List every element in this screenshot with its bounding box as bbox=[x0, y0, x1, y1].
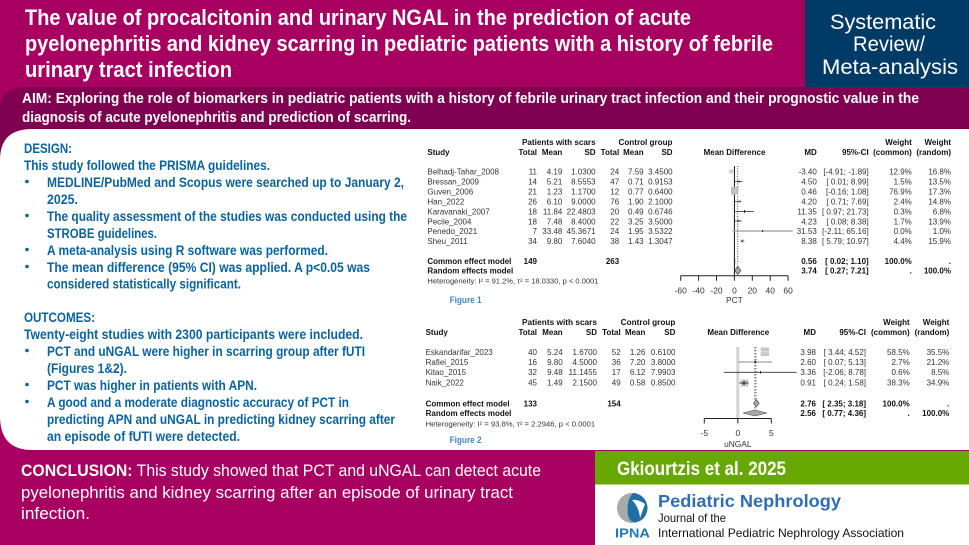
figure 2 study rows: 0.58 bbox=[630, 378, 646, 388]
outcomes section: OUTCOMES: bbox=[24, 310, 95, 326]
figure 1 study rows: [ 0.71; 7.69] bbox=[826, 198, 869, 206]
figure 1 study rows: 11.84 bbox=[543, 207, 563, 216]
figure 1 study rows: Belhadj-Tahar_2008 bbox=[427, 168, 500, 176]
figure 2 summary rows: . bbox=[907, 409, 910, 418]
figure 2 study rows: 0.8500 bbox=[651, 378, 676, 388]
figure 1 summary rows: [ 0.02; 1.10] bbox=[825, 257, 869, 266]
figure 1 table header: Weight bbox=[924, 138, 951, 147]
figure 1 study rows: 7 bbox=[533, 227, 538, 236]
figure 2 study rows: 2.7% bbox=[891, 358, 910, 367]
figure 2 summary rows: 154 bbox=[607, 400, 621, 408]
figure 2 study rows: 17 bbox=[612, 368, 621, 377]
figure 1 study rows: Sheu_2011 bbox=[427, 237, 468, 246]
figure 1 study rows: -3.40 bbox=[799, 168, 817, 176]
figure 1 summary rows: Random effects model bbox=[427, 266, 513, 276]
figure 2 table header: Total bbox=[518, 328, 537, 337]
figure 2 study rows: [-2.06; 8.78] bbox=[823, 368, 866, 377]
figure 1 plot: -60 bbox=[675, 286, 687, 296]
figure 2 study rows: Kitao_2015 bbox=[426, 368, 467, 377]
outcomes section: an episode of fUTI were detected. bbox=[47, 429, 240, 445]
figure 1 summary rows: . bbox=[910, 266, 912, 276]
figure 2 study rows: 0.6% bbox=[891, 368, 910, 377]
figure 1 study rows bbox=[427, 168, 951, 246]
outcomes section: PCT and uNGAL were higher in scarring group after fUTI bbox=[47, 344, 365, 360]
figure 1 study rows: 18 bbox=[528, 217, 538, 226]
icon: IPNA globe logo: IPNA bbox=[615, 526, 650, 540]
figure 1 table header: (common) bbox=[873, 148, 912, 157]
journal name: Pediatric Nephrology bbox=[658, 491, 841, 511]
figure 2 caption: Figure 2 bbox=[450, 435, 482, 445]
figure 1 study rows: 24 bbox=[610, 227, 620, 236]
figure 1 study rows: 22.4803 bbox=[567, 207, 596, 216]
figure 1 study rows: Han_2022 bbox=[427, 198, 465, 206]
figure 1 plot: -20 bbox=[710, 286, 723, 296]
figure 1 study rows: [-2.11; 65.16] bbox=[822, 227, 869, 236]
figure 2 study rows: 0.91 bbox=[800, 378, 817, 388]
figure 1 study rows: 20 bbox=[610, 207, 620, 216]
aim band bbox=[0, 87, 969, 170]
figure 1 study rows: 8.38 bbox=[801, 237, 817, 246]
design section: MEDLINE/PubMed and Scopus were searched up to January 2, bbox=[47, 175, 404, 191]
figure 1 study rows: 34 bbox=[528, 237, 538, 246]
figure 1 study rows: Bressan_2009 bbox=[427, 178, 480, 186]
figure 1 plot: 20 bbox=[748, 286, 757, 296]
figure 1 study rows: 8.5553 bbox=[571, 178, 596, 186]
figure 2 study rows: 2.60 bbox=[800, 358, 817, 367]
figure 2 plot: uNGAL bbox=[724, 439, 752, 449]
figure 2 summary rows: 2.76 bbox=[800, 400, 817, 408]
figure 2 study rows: 9.48 bbox=[547, 368, 563, 377]
figure 1 summary rows: 100.0% bbox=[924, 266, 951, 276]
figure 1 study rows: 4.20 bbox=[801, 198, 817, 206]
figure 1 study rows: 0.9153 bbox=[648, 178, 673, 186]
design section bbox=[24, 141, 407, 292]
design section: DESIGN: bbox=[24, 141, 72, 157]
outcomes section: predicting APN and uNGAL in predicting kidney scarring after bbox=[47, 412, 395, 428]
design section: A meta-analysis using R software was performed. bbox=[47, 243, 328, 259]
figure 1 study rows: 17.3% bbox=[928, 188, 951, 196]
figure 1 study rows: 45.3671 bbox=[567, 227, 596, 236]
journal affiliation: International Pediatric Nephrology Association bbox=[658, 527, 904, 540]
figure 1 study rows: 13.9% bbox=[928, 217, 951, 226]
figure 2 plot: -5 bbox=[701, 428, 708, 438]
figure 2 table header: Study bbox=[426, 328, 448, 337]
figure 2 study rows: 21.2% bbox=[927, 358, 949, 367]
figure 1 study rows: 18 bbox=[528, 207, 538, 216]
figure 2 summary rows: 2.56 bbox=[800, 409, 817, 418]
outcomes section bbox=[24, 310, 395, 445]
forest plot: figure 1 PCT bbox=[427, 138, 951, 305]
figure 2 summary rows: [ 2.35; 3.18] bbox=[822, 400, 866, 408]
figure 2 summary rows: Random effects model bbox=[426, 409, 511, 418]
figure 1 study rows: 3.25 bbox=[628, 217, 644, 226]
figure 2 study rows: 32 bbox=[528, 368, 538, 377]
figure 2 study rows: 45 bbox=[528, 378, 538, 388]
figure 1 table header: Mean Difference bbox=[704, 148, 766, 157]
figure 2 study rows: 1.49 bbox=[547, 378, 563, 388]
title banner: The value of procalcitonin and urinary NGAL in the prediction of acute bbox=[25, 5, 691, 30]
figure 1 study rows: 11 bbox=[529, 168, 538, 176]
study type badge: Meta-analysis bbox=[822, 55, 958, 79]
figure 1 study rows: 12.9% bbox=[889, 168, 912, 176]
title banner: urinary tract infection bbox=[25, 57, 232, 82]
figure 1 plot: 40 bbox=[766, 286, 775, 296]
figure 1 caption: Figure 1 bbox=[450, 295, 482, 305]
forest plot: figure 2 uNGAL bbox=[426, 318, 950, 449]
figure 2 study rows: 3.98 bbox=[800, 348, 817, 357]
design section: considered statistically significant. bbox=[47, 276, 241, 292]
figure 1 summary rows: 100.0% bbox=[885, 257, 912, 266]
figure 2 study rows: 0.6100 bbox=[651, 348, 676, 357]
figure 1 study rows: 9.80 bbox=[547, 237, 563, 246]
figure 1 study rows: 2.1000 bbox=[648, 198, 673, 206]
figure 1 study rows: 14.8% bbox=[928, 198, 951, 206]
figure 1 study rows: 7.6040 bbox=[571, 237, 596, 246]
figure 1 study rows: 3.4500 bbox=[648, 168, 673, 176]
figure 1 study rows: 1.5% bbox=[894, 178, 912, 186]
design section: STROBE guidelines. bbox=[47, 226, 157, 242]
figure 2 study rows: 1.6700 bbox=[573, 348, 598, 357]
figure 1 study rows: 6.10 bbox=[547, 198, 563, 206]
figure 1 plot: 0 bbox=[732, 286, 737, 296]
figure 2 study rows: 58.5% bbox=[887, 348, 910, 357]
study type badge bbox=[805, 0, 969, 87]
figure 1 study rows: 3.5322 bbox=[648, 227, 673, 236]
figure 2 summary rows bbox=[426, 400, 949, 428]
figure 1 study rows: 9.0000 bbox=[571, 198, 596, 206]
figure 1 study rows: 4.50 bbox=[801, 178, 817, 186]
figure 1 plot: -40 bbox=[693, 286, 705, 296]
design section: The quality assessment of the studies was conducted using the bbox=[47, 209, 407, 225]
figure 1 table header: Patients with scars bbox=[522, 138, 596, 147]
figure 2 plot bbox=[701, 347, 797, 449]
figure 1 study rows: 1.0% bbox=[933, 227, 951, 236]
figure 1 summary rows: 0.56 bbox=[801, 257, 817, 266]
figure 1 study rows: 8.4000 bbox=[571, 217, 596, 226]
citation bar: Gkiourtzis et al. 2025 bbox=[617, 458, 786, 480]
figure 1 study rows: 1.43 bbox=[628, 237, 644, 246]
figure 1 study rows: 2.4% bbox=[894, 198, 912, 206]
figure 1 table header bbox=[427, 138, 951, 157]
design section: This study followed the PRISMA guidelines. bbox=[24, 158, 270, 174]
title banner bbox=[0, 0, 805, 87]
figure 2 study rows: 38.3% bbox=[887, 378, 910, 388]
conclusion band: CONCLUSION: This study showed that PCT and uNGAL can detect acute bbox=[21, 461, 541, 480]
figure 1 plot: PCT bbox=[726, 295, 743, 305]
figure 1 table header: Study bbox=[427, 148, 450, 157]
figure 2 table header: Mean Difference bbox=[707, 328, 770, 337]
figure 2 table header: Patients with scars bbox=[522, 318, 598, 327]
figure 2 summary rows: Heterogeneity: I² = 93.8%, τ² = 2.2946, p < 0.0001 bbox=[426, 420, 595, 428]
figure 1 study rows: 7.48 bbox=[547, 217, 563, 226]
figure 1 study rows: 15.9% bbox=[928, 237, 951, 246]
figure 2 table header bbox=[426, 318, 950, 337]
figure 1 study rows: 12 bbox=[610, 188, 620, 196]
figure 2 study rows: Naik_2022 bbox=[426, 378, 464, 388]
figure 2 study rows: 6.12 bbox=[630, 368, 646, 377]
figure 2 study rows: 1.26 bbox=[630, 348, 646, 357]
figure 2 study rows: 49 bbox=[612, 378, 621, 388]
figure 2 table header: SD bbox=[664, 328, 676, 337]
figure 2 study rows: 4.5000 bbox=[573, 358, 598, 367]
outcomes section: Twenty-eight studies with 2300 participants were included. bbox=[24, 327, 363, 343]
figure 2 study rows: 7.20 bbox=[630, 358, 646, 367]
figure 2 study rows: 52 bbox=[612, 348, 621, 357]
figure 1 study rows: 33.48 bbox=[542, 227, 563, 236]
study type badge: Review/ bbox=[853, 32, 925, 56]
figure 1 study rows: 16.8% bbox=[928, 168, 951, 176]
figure 2 summary rows: . bbox=[947, 400, 949, 408]
figure 1 study rows: 76 bbox=[610, 198, 620, 206]
figure 1 study rows: 11.35 bbox=[797, 207, 817, 216]
figure 1 study rows: 1.3047 bbox=[648, 237, 673, 246]
journal block bbox=[595, 484, 969, 545]
figure 1 study rows: 3.5000 bbox=[648, 217, 673, 226]
outcomes section: (Figures 1&2). bbox=[47, 361, 127, 377]
figure 2 table header: (common) bbox=[871, 328, 910, 337]
figure 1 study rows: 24 bbox=[610, 168, 620, 176]
figure 1 study rows: 4.4% bbox=[894, 237, 912, 246]
figure 2 summary rows: 133 bbox=[524, 400, 538, 408]
figure 2 table header: MD bbox=[804, 328, 816, 337]
outcomes section: A good and a moderate diagnostic accuracy of PCT in bbox=[47, 395, 349, 411]
figure 1 study rows: 1.23 bbox=[547, 188, 563, 196]
figure 1 study rows: 4.23 bbox=[801, 217, 817, 226]
figure 1 study rows: Guven_2006 bbox=[427, 188, 474, 196]
outcomes section: PCT was higher in patients with APN. bbox=[47, 378, 257, 394]
figure 1 study rows: 0.71 bbox=[628, 178, 644, 186]
figure 1 summary rows: Heterogeneity: I² = 91.2%, τ² = 18.0330, p < 0.0001 bbox=[427, 276, 598, 286]
figure 1 study rows: 1.1700 bbox=[571, 188, 596, 196]
figure 1 table header: Control group bbox=[618, 138, 673, 147]
figure 2 plot: 0 bbox=[735, 428, 740, 438]
figure 2 summary rows: Common effect model bbox=[426, 400, 510, 408]
figure 1 summary rows: Common effect model bbox=[427, 257, 511, 266]
figure 1 table header: 95%-CI bbox=[842, 148, 869, 157]
figure 2 study rows: 36 bbox=[612, 358, 621, 367]
figure 2 table header: Control group bbox=[621, 318, 676, 327]
figure 1 table header: MD bbox=[804, 148, 817, 157]
figure 2 table header: Mean bbox=[625, 328, 646, 337]
figure 1 study rows: 1.7% bbox=[894, 217, 912, 226]
figure 1 study rows: 0.49 bbox=[628, 207, 644, 216]
figure 1 study rows: 47 bbox=[610, 178, 620, 186]
aim band: diagnosis of acute pyelonephritis and prediction of scarring. bbox=[22, 110, 411, 126]
figure 2 summary rows: 100.0% bbox=[883, 400, 910, 408]
figure 2 study rows: 3.36 bbox=[800, 368, 817, 377]
figure 2 table header: Weight bbox=[923, 318, 950, 327]
figure 1 study rows: [-4.91; -1.89] bbox=[823, 168, 869, 176]
figure 2 study rows: [ 0.24; 1.58] bbox=[824, 378, 866, 388]
figure 1 summary rows: . bbox=[949, 257, 951, 266]
figure 2 table header: Total bbox=[602, 328, 621, 337]
figure 1 study rows: 0.77 bbox=[628, 188, 644, 196]
figure 1 study rows: Penedo_2021 bbox=[427, 227, 478, 236]
figure 1 summary rows: 149 bbox=[524, 257, 538, 266]
figure 2 study rows: 7.9903 bbox=[651, 368, 676, 377]
figure 1 summary rows: 263 bbox=[606, 257, 620, 266]
figure 1 study rows: 76.9% bbox=[889, 188, 912, 196]
figure 1 study rows: 5.21 bbox=[547, 178, 563, 186]
figure 1 plot bbox=[675, 166, 793, 305]
aim band: AIM: Exploring the role of biomarkers in pediatric patients with a history of febrile urinary tract infection and their prognostic value in the bbox=[22, 91, 919, 107]
design section: The mean difference (95% CI) was applied. A p<0.05 was bbox=[47, 260, 370, 276]
figure 1 table header: (random) bbox=[916, 148, 951, 157]
figure 1 study rows: [ 0.01; 8.99] bbox=[826, 178, 869, 186]
figure 2 study rows: 16 bbox=[528, 358, 538, 367]
design section: 2025. bbox=[47, 192, 78, 208]
figure 1 study rows: Karavanaki_2007 bbox=[427, 207, 490, 216]
figure 2 study rows: 8.5% bbox=[931, 368, 949, 377]
citation bar bbox=[595, 451, 969, 484]
figure 1 study rows: 7.59 bbox=[628, 168, 644, 176]
figure 1 study rows: 1.95 bbox=[628, 227, 644, 236]
figure 2 study rows: 2.1500 bbox=[573, 378, 598, 388]
figure 1 study rows: 31.53 bbox=[797, 227, 817, 236]
figure 2 study rows: Rafiei_2015 bbox=[426, 358, 469, 367]
figure 2 study rows bbox=[426, 348, 949, 388]
figure 1 study rows: 0.6400 bbox=[648, 188, 673, 196]
figure 2 study rows: 40 bbox=[528, 348, 538, 357]
figure 1 table header: Total bbox=[518, 148, 537, 157]
figure 2 study rows: 34.9% bbox=[927, 378, 949, 388]
study type badge: Systematic bbox=[830, 10, 936, 34]
figure 1 summary rows bbox=[427, 257, 951, 286]
figure 2 table header: Weight bbox=[883, 318, 910, 327]
figure 2 study rows: 3.8000 bbox=[651, 358, 676, 367]
figure 2 summary rows: 100.0% bbox=[922, 409, 949, 418]
figure 1 study rows: 13.5% bbox=[928, 178, 951, 186]
white content panel bbox=[0, 129, 969, 450]
figure 1 study rows: 38 bbox=[610, 237, 620, 246]
figure 1 table header: Mean bbox=[623, 148, 644, 157]
figure 1 table header: Mean bbox=[542, 148, 562, 157]
figure 2 study rows: [ 0.07; 5.13] bbox=[824, 358, 866, 367]
figure 1 study rows: [-0.16; 1.08] bbox=[826, 188, 869, 196]
figure 1 study rows: Pecile_2004 bbox=[427, 217, 472, 226]
figure 1 study rows: [ 5.79; 10.97] bbox=[822, 237, 869, 246]
figure 1 study rows: 0.3% bbox=[894, 207, 912, 216]
figure 2 study rows: 5.24 bbox=[547, 348, 563, 357]
figure 1 table header: SD bbox=[584, 148, 596, 157]
figure 1 table header: Weight bbox=[885, 138, 912, 147]
figure 1 study rows: 1.0300 bbox=[571, 168, 596, 176]
conclusion band bbox=[0, 450, 595, 545]
figure 1 study rows: 0.6746 bbox=[648, 207, 673, 216]
figure 1 study rows: 26 bbox=[528, 198, 538, 206]
figure 1 study rows: 6.8% bbox=[933, 207, 951, 216]
figure 1 study rows: 1.90 bbox=[628, 198, 644, 206]
figure 2 study rows: 35.5% bbox=[927, 348, 949, 357]
journal affiliation bbox=[658, 512, 904, 540]
figure 1 table header: SD bbox=[661, 148, 673, 157]
figure 1 study rows: 0.0% bbox=[894, 227, 912, 236]
figure 1 study rows: 21 bbox=[528, 188, 538, 196]
title banner: pyelonephritis and kidney scarring in pediatric patients with a history of febrile bbox=[25, 31, 773, 56]
figure 2 table header: 95%-CI bbox=[839, 328, 866, 337]
icon: IPNA globe logo bbox=[615, 493, 650, 540]
figure 1 study rows: 0.46 bbox=[801, 188, 817, 196]
figure 2 study rows: [ 3.44; 4.52] bbox=[824, 348, 866, 357]
conclusion band: infection. bbox=[21, 504, 90, 523]
figure 2 table header: (random) bbox=[915, 328, 950, 337]
figure 1 summary rows: [ 0.27; 7.21] bbox=[825, 266, 869, 276]
figure 2 study rows: Eskandarifar_2023 bbox=[426, 348, 493, 357]
figure 2 study rows: 9.80 bbox=[547, 358, 563, 367]
figure 1 study rows: 4.19 bbox=[547, 168, 563, 176]
journal affiliation: Journal of the bbox=[658, 512, 726, 525]
figure 1 summary rows: 3.74 bbox=[801, 266, 817, 276]
figure 2 study rows: 11.1455 bbox=[569, 368, 598, 377]
figure 2 table header: Mean bbox=[542, 328, 563, 337]
figure 2 plot: 5 bbox=[769, 428, 774, 438]
figure 1 study rows: [ 0.08; 8.38] bbox=[826, 217, 869, 226]
conclusion band: pyelonephritis and kidney scarring after an episode of urinary tract bbox=[21, 483, 513, 502]
figure 2 table header: SD bbox=[586, 328, 597, 337]
figure 1 study rows: [ 0.97; 21.73] bbox=[822, 207, 869, 216]
figure 1 study rows: 22 bbox=[610, 217, 620, 226]
figure 1 table header: Total bbox=[601, 148, 619, 157]
figure 2 summary rows: [ 0.77; 4.36] bbox=[822, 409, 866, 418]
figure 1 plot: 60 bbox=[783, 286, 793, 296]
figure 1 study rows: 14 bbox=[528, 178, 538, 186]
